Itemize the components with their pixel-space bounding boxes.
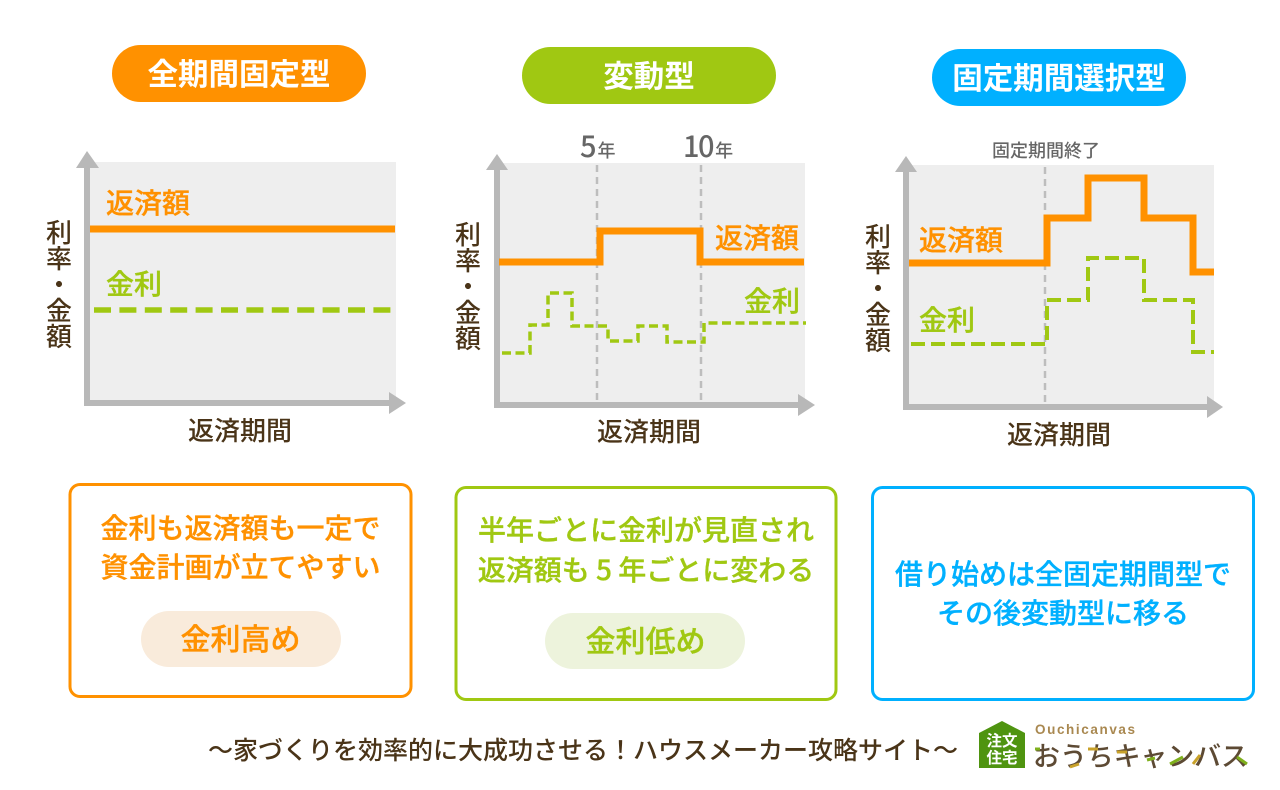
chart: fixed rate: ・: [46, 265, 72, 302]
chart: fixed rate: [46, 151, 406, 448]
description box: 借り始め: その後変動型に移る: [937, 592, 1189, 632]
chart: variable rate: 率: [455, 241, 481, 278]
description box: 金利高め: [70, 484, 411, 696]
panel: fixed-period selection: [865, 49, 1254, 700]
chart: variable rate: 10年: [683, 124, 733, 166]
logo latin name: Ouchicanvas: [1035, 722, 1137, 737]
description box: 借り始め: [872, 488, 1254, 700]
heading pill: 全期間固定型: 全期間固定型: [148, 50, 330, 94]
chart: variable rate: 返済額: [715, 217, 799, 257]
description box: 金利高め: 金利高め: [180, 615, 300, 659]
panel: fixed full-term rate: [46, 45, 411, 696]
heading pill: 固定期間選択型: [932, 49, 1186, 106]
chart: fixed-period selection: 金利: [919, 299, 975, 339]
chart: fixed rate: 返済期間: [188, 411, 292, 448]
chart: variable rate: [455, 124, 815, 449]
chart: variable rate: 額: [455, 319, 481, 356]
heading pill: 変動型: [522, 47, 776, 104]
description box: 金利低め: 返済額も 5 年ごとに変わる: [478, 549, 814, 589]
icon: house badge: 注文: [986, 729, 1018, 751]
chart: fixed-period selection: [865, 137, 1223, 452]
description box: 金利低め: 金利低め: [586, 617, 706, 661]
chart: fixed rate: 額: [46, 317, 72, 354]
heading pill: 全期間固定型: [112, 45, 366, 102]
chart: fixed-period selection: 率: [865, 243, 891, 280]
chart: variable rate: 金: [455, 293, 481, 330]
chart: fixed rate: 利: [46, 213, 72, 250]
description box: 金利高め: 金利も返済額も一定で: [100, 507, 381, 547]
chart: variable rate: ・: [455, 267, 481, 304]
chart: variable rate: 利: [455, 215, 481, 252]
footer tagline: ～家づくりを効率的に大成功させる！ハウスメーカー攻略サイト～: [208, 731, 958, 767]
chart: fixed-period selection: 金: [865, 295, 891, 332]
icon: house badge: 住宅: [986, 746, 1018, 768]
logo wordmark: おうちキャンバス: [1033, 735, 1248, 774]
heading pill: 固定期間選択型: 固定期間選択型: [952, 54, 1166, 98]
chart: variable rate: 返済期間: [597, 412, 701, 449]
description box: 金利低め: 半年ごとに金利が見直され: [478, 509, 814, 549]
chart: fixed-period selection: 利: [865, 217, 891, 254]
icon: house badge: [979, 721, 1025, 768]
logo: おうちキャンバス: [979, 721, 1248, 774]
chart: fixed-period selection: ・: [865, 269, 891, 306]
chart: fixed-period selection: 固定期間終了: [992, 137, 1100, 163]
chart: fixed-period selection: 返済期間: [1007, 415, 1111, 452]
panel: variable rate: [455, 47, 836, 700]
description box: 金利高め: 資金計画が立てやすい: [100, 546, 381, 586]
chart: variable rate: 金利: [744, 280, 800, 320]
chart: fixed-period selection: 額: [865, 321, 891, 358]
description box: 借り始め: 借り始めは全固定期間型で: [895, 553, 1231, 593]
chart: fixed-period selection: 返済額: [919, 219, 1003, 259]
chart: fixed rate: 金: [46, 291, 72, 328]
description box: 金利低め: [456, 488, 836, 700]
chart: variable rate: 5年: [580, 124, 616, 166]
heading pill: 変動型: 変動型: [603, 52, 695, 96]
chart: fixed rate: 金利: [106, 263, 162, 303]
chart: fixed rate: 率: [46, 239, 72, 276]
chart: fixed rate: 返済額: [106, 182, 190, 222]
